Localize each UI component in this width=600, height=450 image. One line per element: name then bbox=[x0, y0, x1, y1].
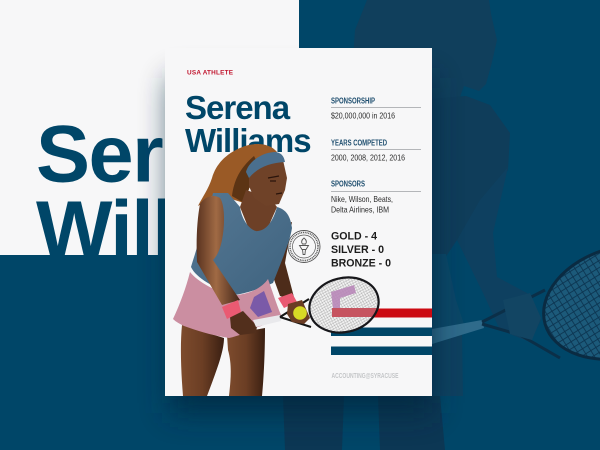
oversized background name: Williams bbox=[36, 185, 352, 275]
oversized background name: Serena bbox=[36, 110, 300, 200]
athlete: left leg bbox=[181, 325, 224, 396]
stat: years competed: 2000, 2008, 2012, 2016 bbox=[331, 152, 405, 162]
oversized background name bbox=[36, 110, 352, 275]
silhouette: skirt bbox=[432, 254, 466, 345]
tennis ball bbox=[293, 306, 307, 320]
athlete: face bbox=[249, 160, 287, 206]
icon: torch medallion bbox=[288, 230, 320, 262]
stat: sponsorship bbox=[331, 96, 421, 120]
athlete: neck and chest bbox=[240, 190, 277, 232]
athlete: eye and brow bbox=[268, 176, 282, 194]
athlete: near arm bbox=[197, 196, 240, 305]
athlete: near wristband bbox=[222, 300, 241, 319]
stat: sponsorship: $20,000,000 in 2016 bbox=[331, 110, 395, 120]
decorative stripes bbox=[331, 308, 432, 355]
athlete: near hand bbox=[230, 311, 257, 335]
athlete: hair bbox=[198, 144, 277, 206]
silhouette: racket head bbox=[530, 227, 600, 377]
card title bbox=[185, 89, 311, 159]
medal counts: SILVER - 0 bbox=[331, 244, 384, 256]
card title: Williams bbox=[185, 122, 311, 159]
stat: sponsors bbox=[331, 180, 421, 214]
athlete: right leg bbox=[227, 328, 265, 396]
card shadow bbox=[170, 78, 432, 413]
poster card bbox=[165, 48, 432, 396]
stat: sponsors: Nike, Wilson, Beats, bbox=[331, 194, 393, 204]
stat: sponsors: Delta Airlines, IBM bbox=[331, 204, 389, 214]
footer logo text: ACCOUNTING@SYRACUSE bbox=[332, 373, 399, 380]
athlete: skirt shadow bbox=[250, 291, 272, 317]
silhouette: hair and head bbox=[353, 0, 497, 120]
stat: sponsors: SPONSORS bbox=[331, 180, 365, 188]
racket: handle bbox=[253, 315, 281, 327]
athlete cutout bbox=[173, 144, 384, 396]
stat: years competed: YEARS COMPETED bbox=[331, 138, 387, 148]
background: navy right panel bbox=[299, 0, 600, 450]
card title: Serena bbox=[185, 89, 291, 126]
racket: throat bbox=[280, 299, 311, 327]
background: navy lower band bbox=[0, 255, 600, 450]
silhouette: torso bbox=[420, 96, 510, 262]
athlete: far arm bbox=[274, 222, 294, 297]
athlete: headband bbox=[246, 152, 285, 178]
eyebrow label: USA ATHLETE bbox=[187, 70, 234, 76]
athlete: shirt bbox=[191, 193, 292, 295]
athlete: hair shading bbox=[232, 156, 256, 202]
athlete: far wristband bbox=[278, 293, 297, 308]
stat: sponsorship: SPONSORSHIP bbox=[331, 96, 375, 106]
silhouette: racket handle bbox=[432, 320, 484, 344]
athlete: skirt bbox=[173, 272, 281, 338]
athlete: far hand bbox=[287, 300, 310, 324]
silhouette: upper thigh bbox=[432, 330, 463, 396]
silhouette: legs bbox=[283, 396, 445, 450]
medal counts: GOLD - 4 bbox=[331, 230, 378, 242]
medal counts: BRONZE - 0 bbox=[331, 258, 391, 270]
silhouette: hand bbox=[503, 293, 541, 340]
stat: years competed bbox=[331, 138, 421, 162]
silhouette: racket throat bbox=[482, 290, 560, 358]
racket: head bbox=[308, 276, 380, 334]
silhouette: arm bbox=[457, 167, 541, 342]
duotone athlete silhouette bbox=[283, 0, 600, 450]
medal counts bbox=[331, 230, 391, 270]
